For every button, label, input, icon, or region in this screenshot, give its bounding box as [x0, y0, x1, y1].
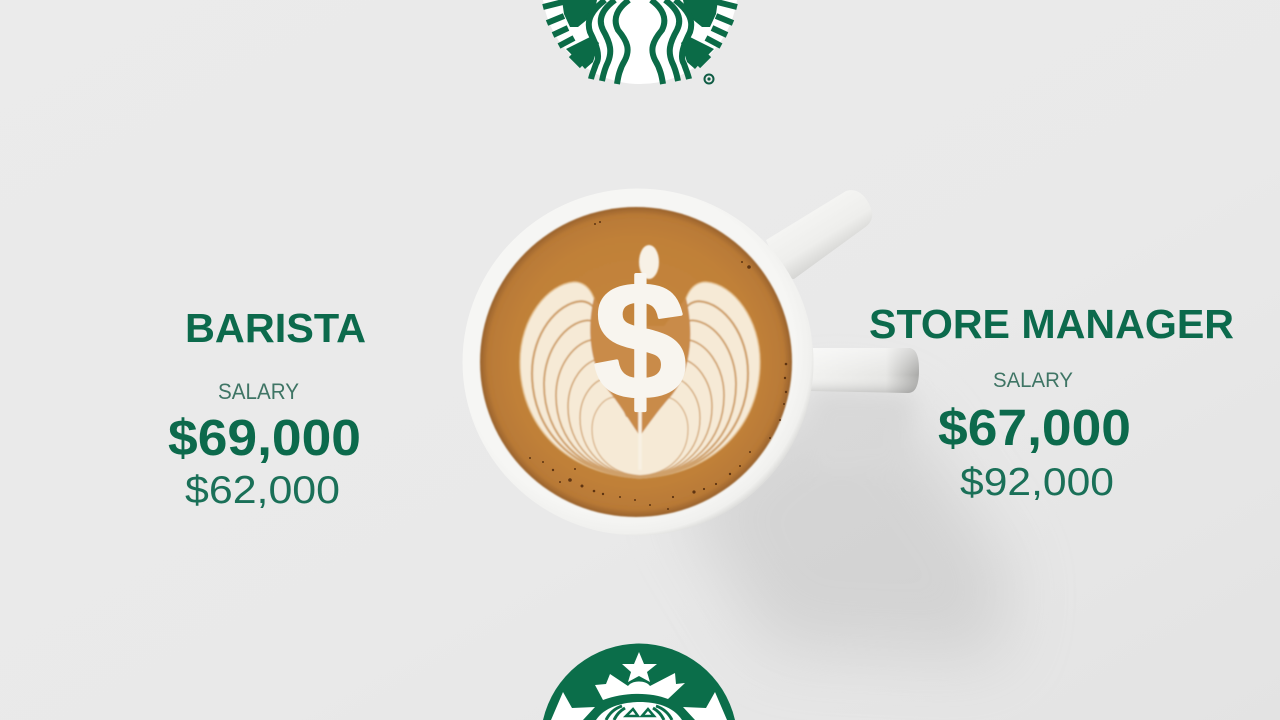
figure: high salary: $67,000	[938, 399, 1131, 456]
siren face	[596, 702, 682, 720]
latte dollar sign: $	[594, 249, 686, 434]
cup rim	[462, 188, 814, 536]
coffee cup	[462, 188, 814, 536]
heading: store manager: STORE MANAGER	[869, 301, 1234, 347]
foam specks	[529, 221, 787, 510]
crown	[595, 673, 685, 700]
logo: top Starbucks emblem	[543, 0, 737, 84]
right cup handle	[808, 348, 919, 393]
cup shadow	[680, 395, 1010, 660]
label: salary: SALARY	[993, 369, 1073, 392]
upper cup handle	[766, 190, 872, 279]
latte art rosetta	[520, 282, 760, 478]
coffee surface	[480, 207, 792, 517]
heading: barista: BARISTA	[185, 305, 366, 351]
figure: high salary: $69,000	[168, 409, 361, 466]
panel: barista salary	[168, 305, 366, 512]
left siren parts	[543, 0, 629, 84]
star	[622, 652, 657, 682]
right siren parts	[651, 0, 737, 84]
logo: bottom Starbucks emblem	[543, 644, 735, 720]
registered mark	[704, 74, 714, 84]
side stars	[551, 692, 595, 720]
figure: low salary: $62,000	[185, 469, 340, 512]
label: salary: SALARY	[218, 379, 299, 404]
figure: low salary: $92,000	[960, 461, 1114, 504]
panel: store manager salary	[869, 301, 1234, 504]
